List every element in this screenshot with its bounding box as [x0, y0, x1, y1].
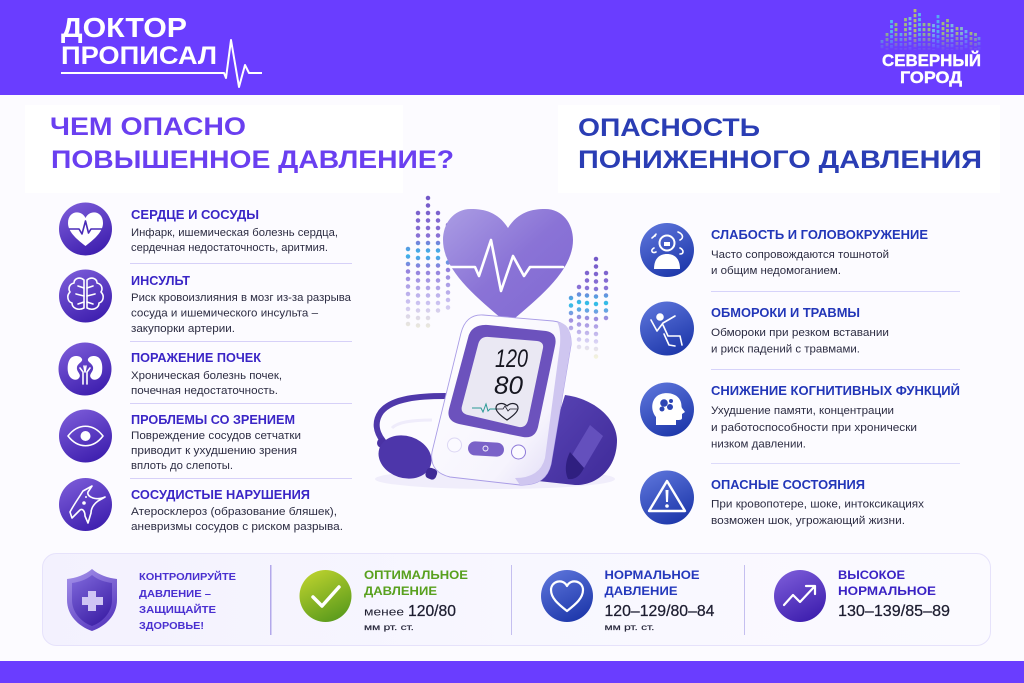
- item: dangerous conditions: ОПАСНЫЕ СОСТОЯНИЯ: [711, 478, 865, 492]
- callout: control pressure: ЗАЩИЩАЙТЕ: [139, 603, 216, 616]
- optimal pressure: ДАВЛЕНИЕ: [364, 586, 437, 598]
- normal pressure: мм рт. ст.: [604, 622, 654, 632]
- item: vascular disorders: Атеросклероз (образование бляшек),: [131, 506, 337, 518]
- title: high pressure: [50, 113, 454, 174]
- title: low pressure: [578, 114, 982, 174]
- callout: control pressure: [67, 569, 236, 632]
- optimal pressure: мм рт. ст.: [364, 622, 414, 632]
- item: dangerous conditions: возможен шок, угрожающий жизни.: [711, 515, 905, 527]
- optimal pressure: ОПТИМАЛЬНОЕ: [364, 570, 468, 582]
- item: fainting and injuries: Обмороки при резком вставании: [711, 327, 889, 339]
- logo: Доктор прописал: ПРОПИСАЛ: [61, 42, 217, 70]
- optimal pressure: 120/80: [408, 603, 456, 620]
- item: kidneys: ПОРАЖЕНИЕ ПОЧЕК: [131, 351, 261, 365]
- logo: Северный город: [878, 9, 984, 87]
- item: weakness and dizziness: [640, 223, 960, 292]
- item: dangerous conditions: [640, 470, 925, 527]
- item: stroke: Риск кровоизлияния в мозг из-за разрыва: [131, 292, 351, 304]
- high normal pressure: ВЫСОКОЕ: [838, 570, 905, 582]
- monitor body: 120: [495, 345, 528, 373]
- monitor body: 80: [494, 372, 523, 400]
- item: kidneys: [58, 342, 352, 404]
- item: fainting and injuries: [640, 302, 960, 370]
- item: vascular disorders: аневризмы сосудов с риском разрыва.: [131, 521, 343, 533]
- callout: control pressure: КОНТРОЛИРУЙТЕ: [139, 570, 236, 583]
- optimal pressure: менее: [364, 606, 404, 618]
- item: weakness and dizziness: и общим недомоганием.: [711, 265, 841, 277]
- item: vascular disorders: СОСУДИСТЫЕ НАРУШЕНИЯ: [131, 488, 310, 502]
- normal pressure: [541, 570, 715, 632]
- item: vision: [59, 410, 352, 479]
- item: weakness and dizziness: СЛАБОСТЬ И ГОЛОВОКРУЖЕНИЕ: [711, 228, 928, 242]
- equalizer dots: [408, 198, 606, 358]
- title: low pressure: ПОНИЖЕННОГО ДАВЛЕНИЯ: [578, 146, 982, 174]
- normal pressure: ДАВЛЕНИЕ: [604, 586, 678, 598]
- item: stroke: [59, 270, 352, 342]
- logo: Доктор прописал: [61, 12, 262, 87]
- item: stroke: закупорки артерии.: [131, 323, 235, 335]
- header band: [0, 0, 1024, 95]
- item: vision: приводит к ухудшению зрения: [131, 445, 297, 457]
- item: stroke: ИНСУЛЬТ: [131, 274, 190, 288]
- item: stroke: сосуда и ишемического инсульта –: [131, 308, 318, 320]
- item: kidneys: почечная недостаточность.: [131, 385, 278, 397]
- panel: high pressure risks: [58, 202, 352, 533]
- item: heart and vessels: СЕРДЦЕ И СОСУДЫ: [131, 208, 259, 222]
- title: low pressure: ОПАСНОСТЬ: [578, 114, 760, 142]
- logo: Доктор прописал: ДОКТОР: [61, 12, 187, 43]
- item: fainting and injuries: ОБМОРОКИ И ТРАВМЫ: [711, 306, 860, 320]
- high normal pressure: [774, 570, 950, 622]
- monitor body: [432, 315, 571, 485]
- item: cognitive decline: СНИЖЕНИЕ КОГНИТИВНЫХ ФУНКЦИЙ: [711, 383, 960, 398]
- item: kidneys: Хроническая болезнь почек,: [131, 370, 282, 382]
- item: vision: вплоть до слепоты.: [131, 460, 233, 472]
- tube: [377, 396, 445, 441]
- high normal pressure: 130–139/85–89: [838, 603, 950, 620]
- item: cognitive decline: и работоспособности при хронически: [711, 422, 917, 434]
- item: weakness and dizziness: Часто сопровождаются тошнотой: [711, 249, 889, 261]
- item: vision: Повреждение сосудов сетчатки: [131, 430, 301, 442]
- logo: Северный город: СЕВЕРНЫЙ: [882, 51, 981, 70]
- logo: Северный город: ГОРОД: [900, 68, 962, 87]
- callout: control pressure: ЗДОРОВЬЕ!: [139, 620, 204, 632]
- item: cognitive decline: [640, 382, 960, 464]
- panel: bottom pressure norms: [42, 554, 990, 646]
- normal pressure: НОРМАЛЬНОЕ: [604, 570, 700, 582]
- cuff: [538, 395, 617, 485]
- item: heart and vessels: сердечная недостаточность, аритмия.: [131, 242, 328, 254]
- panel: low pressure risks: [640, 223, 960, 527]
- high normal pressure: НОРМАЛЬНОЕ: [838, 586, 936, 598]
- title: high pressure: ЧЕМ ОПАСНО: [50, 113, 246, 141]
- normal pressure: 120–129/80–84: [604, 603, 715, 620]
- title: high pressure: ПОВЫШЕННОЕ ДАВЛЕНИЕ?: [51, 146, 454, 174]
- item: cognitive decline: низком давлении.: [711, 438, 806, 450]
- item: dangerous conditions: При кровопотере, шоке, интоксикациях: [711, 498, 925, 510]
- item: vision: ПРОБЛЕМЫ СО ЗРЕНИЕМ: [131, 413, 295, 427]
- optimal pressure: [300, 570, 468, 632]
- bulb: [373, 429, 438, 485]
- illustration: blood pressure monitor: [373, 198, 617, 489]
- callout: control pressure: ДАВЛЕНИЕ –: [139, 588, 211, 600]
- item: vascular disorders: [59, 478, 343, 533]
- ground shadow: [375, 469, 615, 489]
- item: cognitive decline: Ухудшение памяти, концентрации: [711, 405, 894, 417]
- item: heart and vessels: [59, 202, 352, 264]
- item: fainting and injuries: и риск падений с травмами.: [711, 344, 860, 356]
- footer band: [0, 661, 1024, 683]
- heart with pulse: [443, 209, 573, 324]
- item: heart and vessels: Инфарк, ишемическая болезнь сердца,: [131, 227, 338, 239]
